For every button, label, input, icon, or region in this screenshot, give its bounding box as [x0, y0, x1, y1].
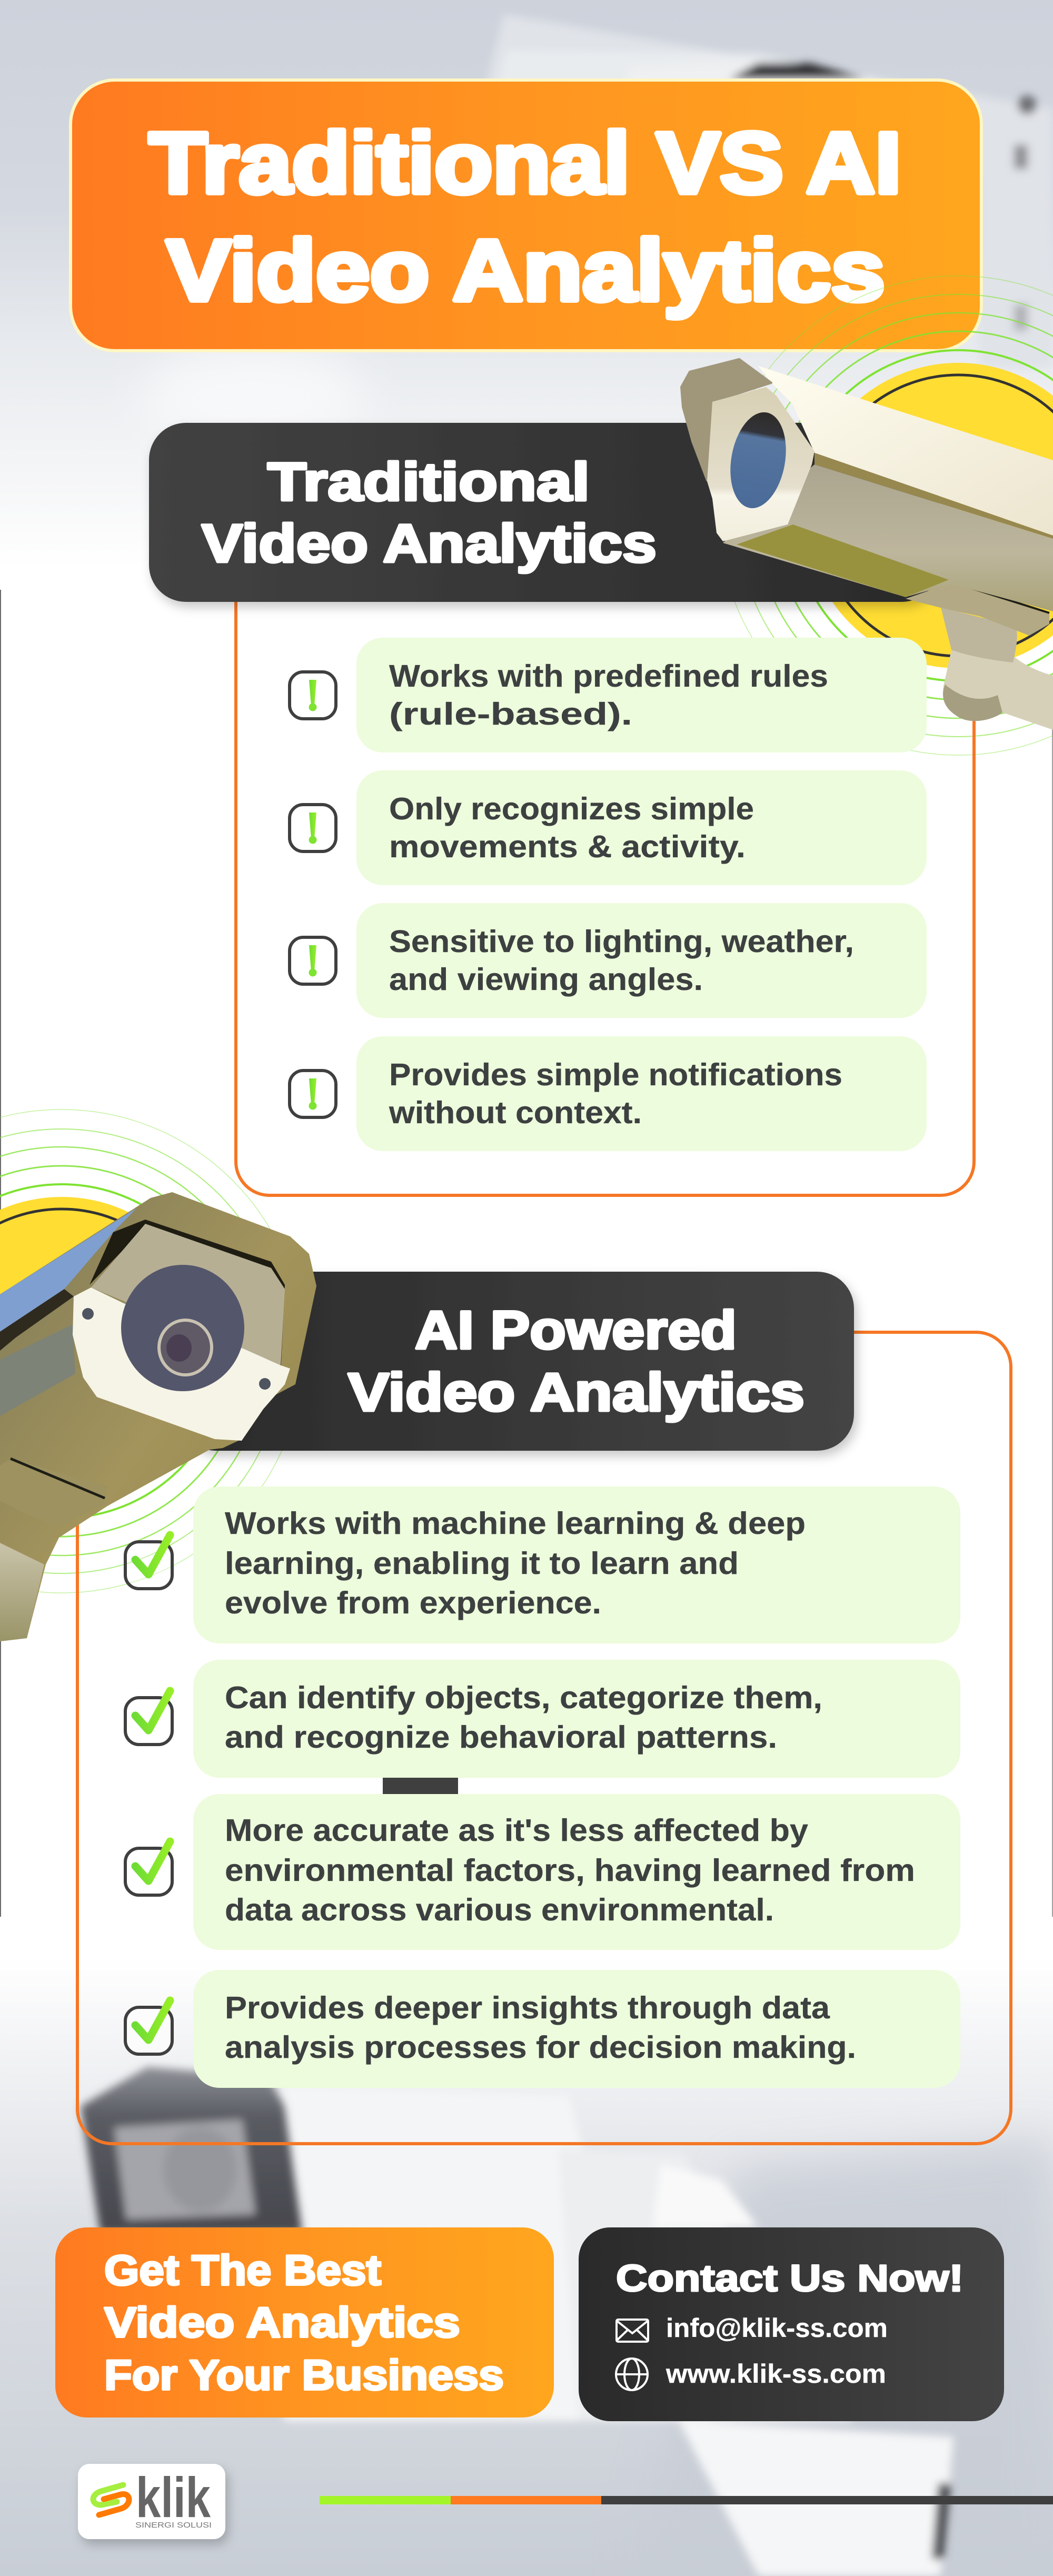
item: identify objects [125, 1660, 960, 1778]
heading: ai powered video analytics [179, 1272, 854, 1451]
item: deeper insights: Provides deeper insights through data [225, 1990, 830, 2025]
item: more accurate: data across various environmental. [225, 1893, 774, 1927]
heading: ai powered video analytics: Video Analytics [348, 1362, 804, 1422]
icon: envelope [617, 2320, 648, 2342]
item: simple movements: Only recognizes simple [389, 791, 754, 826]
call to action box: For Your Business [104, 2352, 504, 2399]
item: simple notifications: without context. [389, 1095, 642, 1130]
item: machine learning: Works with machine learning & deep [225, 1506, 806, 1541]
decorative signal rings and yellow circle: top camera [719, 276, 1053, 755]
call to action box: Get The Best [104, 2247, 381, 2294]
heading: ai powered video analytics: AI Powered [415, 1300, 737, 1360]
camera photo: top right [681, 359, 1053, 730]
tricolor footer bar [320, 2496, 1053, 2504]
title banner: Video Analytics [166, 222, 885, 319]
item: sensitive to conditions: Sensitive to lighting, weather, [389, 924, 854, 959]
item: machine learning: learning, enabling it to learn and [225, 1546, 739, 1581]
heading: traditional video analytics: Traditional [267, 452, 590, 512]
contact box [579, 2227, 1004, 2421]
connector tab [383, 1778, 458, 1794]
item: simple notifications: Provides simple notifications [389, 1057, 842, 1092]
panel: traditional video analytics [236, 600, 974, 1195]
item: more accurate: More accurate as it's less affected by [225, 1813, 808, 1848]
contact box: info@klik-ss.com [666, 2313, 888, 2343]
item: deeper insights [125, 1970, 960, 2088]
item: simple movements: movements & activity. [389, 829, 746, 864]
camera photo: lower left [0, 1192, 316, 1641]
item: rule-based: Works with predefined rules [389, 659, 828, 693]
title banner [71, 80, 981, 351]
item: simple movements [290, 770, 927, 885]
item: more accurate [125, 1794, 960, 1950]
item: deeper insights: analysis processes for decision making. [225, 2030, 856, 2065]
item: simple notifications [290, 1036, 927, 1151]
item: sensitive to conditions: and viewing angles. [389, 962, 703, 997]
item: identify objects: and recognize behavioral patterns. [225, 1720, 777, 1755]
item: identify objects: Can identify objects, categorize them, [225, 1680, 822, 1715]
heading: traditional video analytics: Video Analytics [202, 513, 657, 573]
call to action box: Video Analytics [104, 2299, 460, 2346]
contact box: www.klik-ss.com [665, 2359, 886, 2389]
contact box: Contact Us Now! [616, 2258, 963, 2300]
logo: SINERGI SOLUSI [135, 2521, 212, 2530]
heading: traditional video analytics [149, 423, 939, 602]
icon: globe [616, 2359, 648, 2390]
logo [78, 2464, 225, 2539]
item: sensitive to conditions [290, 903, 927, 1018]
logo: klik [136, 2465, 211, 2529]
item: machine learning [125, 1487, 960, 1643]
item: machine learning: evolve from experience. [225, 1586, 601, 1620]
decorative signal rings and yellow circle: lower camera [0, 1109, 303, 1593]
panel: ai powered video analytics [77, 1332, 1011, 2144]
call to action box [55, 2227, 554, 2418]
item: rule-based [290, 638, 927, 752]
item: rule-based: (rule-based). [389, 697, 632, 731]
title banner: Traditional VS AI [149, 115, 901, 211]
item: more accurate: environmental factors, having learned from [225, 1853, 915, 1888]
